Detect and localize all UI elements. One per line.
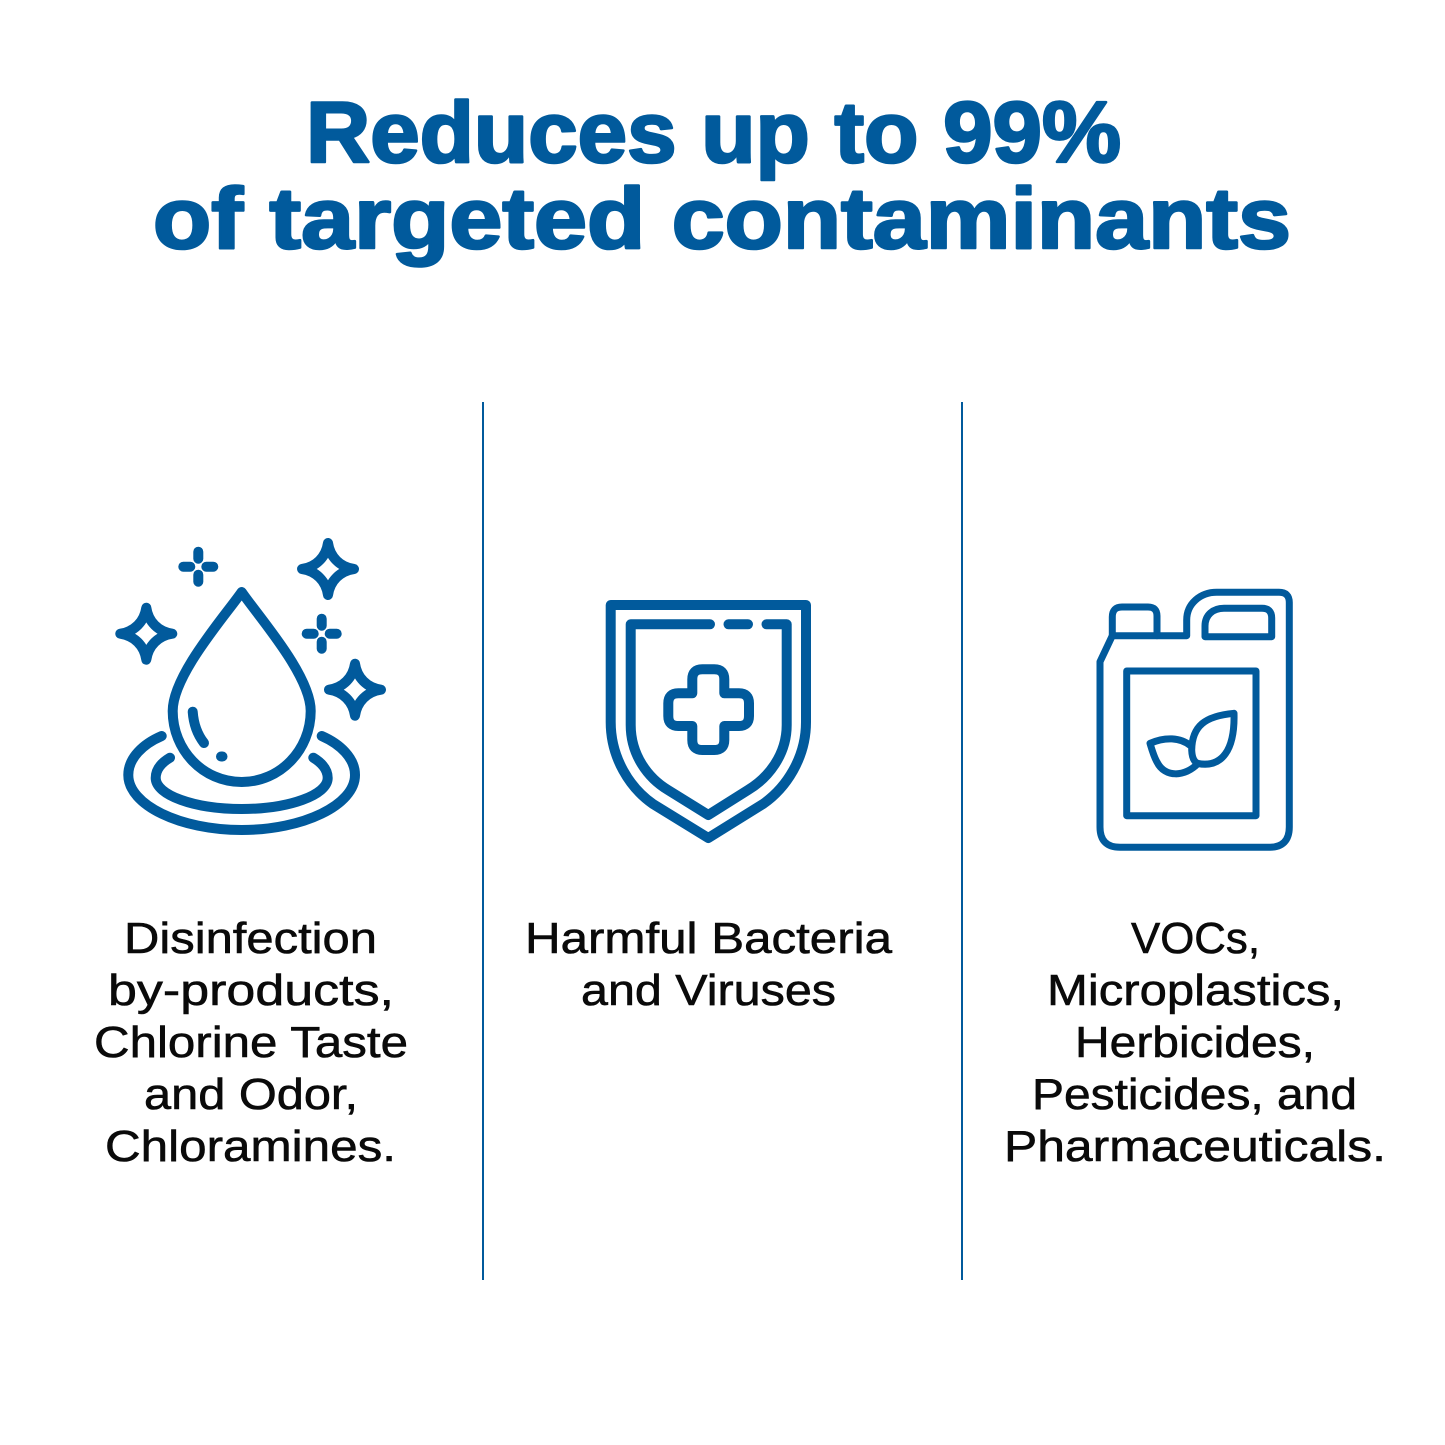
panel: chemicals	[1004, 592, 1386, 1171]
title: Reduces up to 99%	[306, 85, 1121, 181]
text: chemicals list	[1004, 914, 1386, 1171]
divider: left	[482, 402, 484, 1280]
title: of targeted contaminants	[153, 171, 1291, 267]
icon: shield with cross	[611, 605, 806, 838]
icon: water drop with sparkles	[120, 543, 381, 830]
text: bacteria and viruses	[525, 914, 893, 1015]
text: disinfection list: Chlorine Taste	[94, 1018, 408, 1067]
text: bacteria and viruses: Harmful Bacteria	[525, 914, 893, 963]
text: chemicals list: Microplastics,	[1047, 966, 1344, 1015]
text: bacteria and viruses: and Viruses	[581, 966, 836, 1015]
icon: jug with leaves	[1100, 592, 1289, 847]
text: chemicals list: VOCs,	[1131, 914, 1260, 963]
text: disinfection list: by-products,	[108, 966, 394, 1015]
text: chemicals list: Herbicides,	[1075, 1018, 1315, 1067]
text: chemicals list: Pharmaceuticals.	[1004, 1122, 1386, 1171]
text: disinfection list: and Odor,	[144, 1070, 358, 1119]
text: disinfection list: Chloramines.	[105, 1122, 396, 1171]
divider: right	[961, 402, 963, 1280]
text: chemicals list: Pesticides, and	[1032, 1070, 1357, 1119]
text: disinfection list: Disinfection	[124, 914, 377, 963]
title	[153, 85, 1291, 267]
panel: bacteria	[525, 605, 893, 1015]
panel: disinfection	[94, 543, 408, 1171]
text: disinfection list	[94, 914, 408, 1171]
